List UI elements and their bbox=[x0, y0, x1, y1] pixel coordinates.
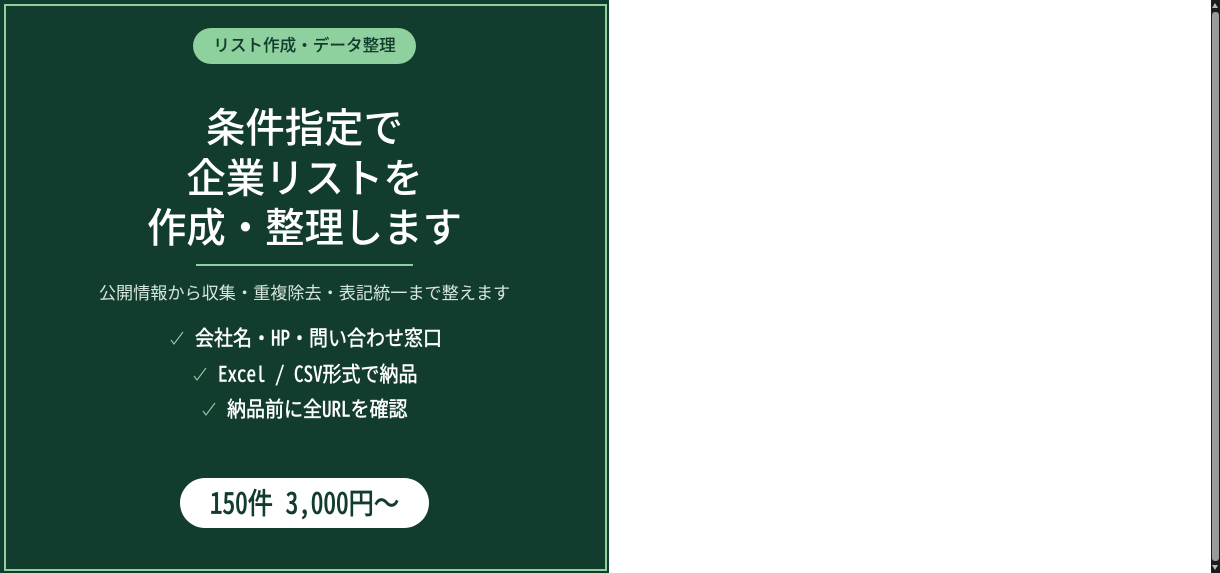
panel: dark green card bbox=[0, 0, 609, 573]
title: 条件指定で bbox=[206, 105, 403, 151]
price text: 150件 3,000円〜 bbox=[210, 481, 399, 522]
frame border bbox=[4, 4, 607, 571]
title: 作成・整理します bbox=[147, 205, 462, 251]
title bbox=[147, 105, 462, 251]
check item: company data: 会社名・HP・問い合わせ窓口 bbox=[195, 323, 442, 352]
scrollbar down arrow bbox=[1212, 565, 1218, 570]
scrollbar bbox=[1211, 0, 1220, 573]
icon: check mark bbox=[202, 402, 216, 416]
icon: check mark bbox=[194, 368, 206, 381]
check item: delivery format: Excel / CSV形式で納品 bbox=[218, 359, 418, 388]
title: 企業リストを bbox=[186, 155, 423, 201]
checklist bbox=[170, 323, 442, 423]
check item: URL verification: 納品前に全URLを確認 bbox=[227, 394, 408, 423]
icon: check mark bbox=[170, 332, 184, 345]
subtitle: 公開情報から収集・重複除去・表記統一まで整えます bbox=[99, 283, 510, 303]
scrollbar up arrow bbox=[1212, 3, 1218, 8]
price button bbox=[180, 478, 429, 528]
divider under title bbox=[196, 264, 413, 266]
badge: category pill: リスト作成・データ整理 bbox=[213, 36, 396, 55]
badge: category pill bbox=[193, 28, 416, 64]
scrollbar thumb bbox=[1212, 12, 1219, 561]
